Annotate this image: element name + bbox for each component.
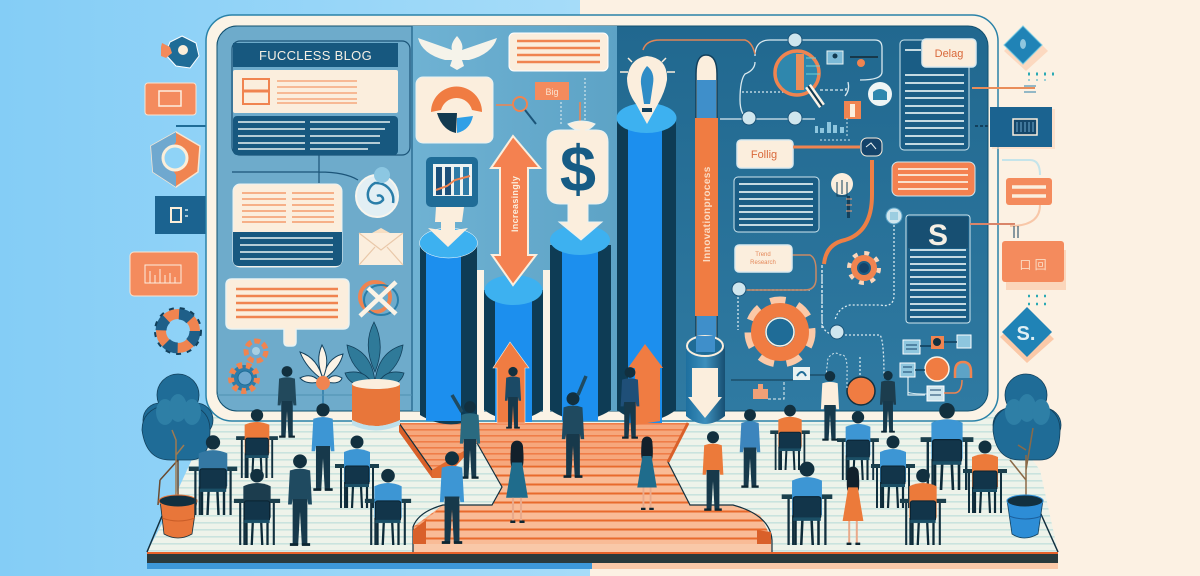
text block: orange lines card xyxy=(509,33,608,71)
icon: mini bar cluster xyxy=(815,118,850,140)
chart: donut card xyxy=(416,77,493,143)
text block: dark card xyxy=(233,116,398,155)
tree: left xyxy=(142,374,213,538)
icon: dollar tag xyxy=(547,121,608,240)
tablet frame xyxy=(206,15,998,421)
panel: middle infographic icons xyxy=(416,33,608,207)
text block: document with Delag label: Delag xyxy=(935,48,963,60)
label: BIG tag xyxy=(535,82,569,100)
panel: speech card xyxy=(226,279,349,346)
arrow: orange up in column 4 xyxy=(628,344,663,425)
icon: bottom chart chip xyxy=(731,367,830,399)
icon: gears xyxy=(231,341,266,391)
central orange stairs xyxy=(399,423,772,552)
potted plant xyxy=(345,322,404,430)
icon: dark box xyxy=(155,196,213,234)
icon: profile chip xyxy=(827,51,878,67)
icon: white leaf plant xyxy=(300,345,343,412)
arrow: double vertical xyxy=(491,136,540,285)
arrow: orange up in column 2 xyxy=(493,342,529,423)
icon: orange box xyxy=(1002,241,1066,290)
column 4 with bulb xyxy=(616,56,676,425)
icon: envelope xyxy=(359,228,403,265)
label: small text card: Research xyxy=(750,260,776,266)
thermometer tube: Innovationprocess xyxy=(702,166,713,262)
icon: small gear xyxy=(849,253,879,283)
floor platform xyxy=(147,405,1058,569)
icon: connector nodes xyxy=(732,33,844,339)
column 1 with arrow xyxy=(420,207,478,424)
icon: dollar tag: $ xyxy=(560,132,596,205)
icon: magnifier xyxy=(775,51,822,106)
text block: S document xyxy=(906,215,970,323)
icon: gear ring xyxy=(155,308,201,354)
audience: standing people xyxy=(278,366,896,546)
icon: orange window xyxy=(145,83,196,115)
icon: hexagon node xyxy=(161,36,199,68)
column 2 with arrow xyxy=(477,136,550,423)
icon: orange equals box xyxy=(1006,178,1052,205)
icon: orange node xyxy=(826,353,875,405)
arrow: into column 1 xyxy=(428,207,468,247)
icon: process flow nodes xyxy=(900,335,971,401)
thermometer tube xyxy=(686,55,725,424)
text block: S document: S xyxy=(928,219,948,252)
icon: orange page tag xyxy=(844,101,861,119)
heading: blog title bar: FUCCLESS BLOG xyxy=(259,48,372,63)
icon: blue diamond xyxy=(1004,26,1048,71)
icon: round badge xyxy=(868,82,892,106)
icon: eagle emblem xyxy=(418,36,497,70)
icon: dark screen box xyxy=(990,107,1055,149)
left outer icons xyxy=(130,36,230,354)
text block: document with Delag label xyxy=(900,39,976,150)
icon: S diamond xyxy=(1000,307,1054,363)
heading: blog title bar xyxy=(233,43,398,67)
label: small text card xyxy=(735,245,792,272)
audience: seated people at desks xyxy=(189,403,1007,545)
text block: lines box xyxy=(734,177,819,232)
column 3 with dollar tag xyxy=(547,121,611,421)
label: small text card: Trend xyxy=(755,252,771,258)
panel: left blog panel xyxy=(217,41,412,412)
label: Follig xyxy=(737,140,793,168)
right outer icons xyxy=(970,26,1066,363)
icon: ring hexagon xyxy=(151,132,200,187)
icon: badge node xyxy=(886,208,902,224)
text block: cream card xyxy=(233,70,398,113)
panel: second card xyxy=(233,184,342,267)
icon: S diamond: S. xyxy=(1017,323,1035,345)
panel: right process map xyxy=(643,33,976,405)
icon: magnifier connector xyxy=(496,97,536,124)
arrow: orange pipe xyxy=(824,160,872,264)
chart: small bar chart card xyxy=(426,157,478,207)
arrow: double vertical: Increasingly xyxy=(510,176,520,232)
icon: spiral xyxy=(356,167,398,217)
tree: right xyxy=(993,374,1061,538)
icon: orange chart box xyxy=(130,252,198,296)
icon: ring with cross xyxy=(360,282,398,316)
icon: connector chip xyxy=(861,138,882,156)
label: BIG tag: Big xyxy=(545,87,559,97)
icon: light bulb xyxy=(620,56,675,124)
icon: small bulb xyxy=(831,173,853,218)
icon: orange box: 口 回 xyxy=(1019,258,1047,272)
icon: large gear xyxy=(751,303,809,361)
label: Follig: Follig xyxy=(751,149,777,161)
arrow: white down xyxy=(688,368,722,418)
text block: orange lines box xyxy=(892,162,975,196)
